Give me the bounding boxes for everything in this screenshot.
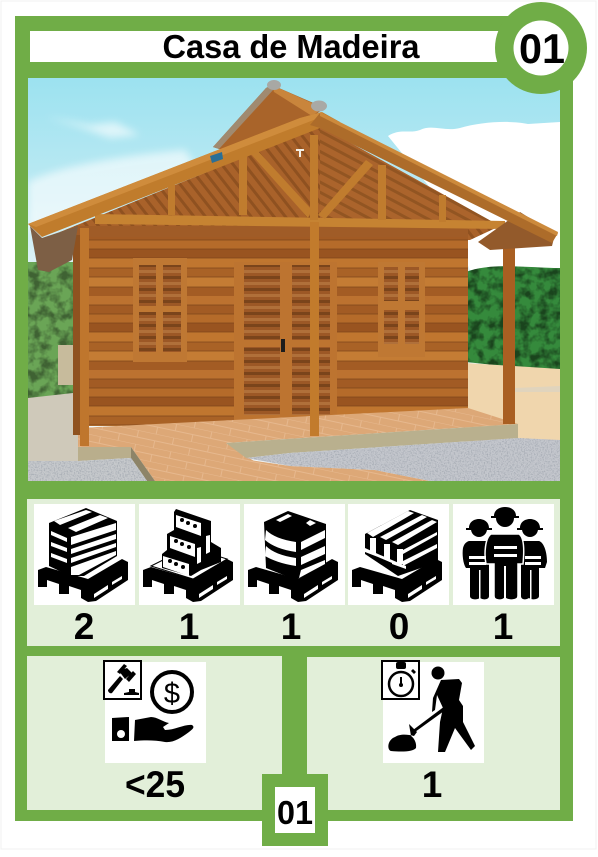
title: Casa de Madeira [162,28,420,65]
left window [133,258,187,362]
material counts: 1 [179,606,199,647]
bottom page badge [262,774,328,846]
icon: hand receiving money: $ [164,678,180,710]
gable boarding [60,126,500,240]
icon: steel beams pallet [348,504,449,605]
panel: house photo [28,78,560,481]
gravel [28,438,560,481]
card number: 01 [519,25,565,72]
page number: 01 [277,794,313,831]
door [234,262,337,421]
material counts [74,606,513,647]
icon: worker shovelling [383,662,484,763]
material counts: 0 [389,606,409,647]
icon: gavel [104,661,141,699]
material counts: 1 [281,606,301,647]
posts [73,222,515,446]
icon: sacks pallet [244,504,345,605]
panel: cost [27,656,282,810]
icon: hand receiving money [105,662,206,763]
icon: stopwatch [382,661,419,699]
wall [75,236,468,426]
background trees and ground [28,262,560,465]
material counts: 2 [74,606,94,647]
clouds [28,117,560,270]
porch floor and path [78,408,518,481]
panel: materials [27,499,560,647]
icon: wood pallet [34,504,135,605]
icon: workers [453,504,554,605]
time value: 1 [422,764,442,805]
panel: time [307,657,560,810]
front roof fascia [28,100,558,243]
soffits [30,226,78,272]
back roof [213,80,325,150]
cost value: <25 [125,764,185,805]
number badge circle [495,2,587,94]
beam and struts [95,135,505,229]
icon: bricks pallet [139,504,240,605]
material counts: 1 [493,606,513,647]
right window [378,267,425,352]
title bar [30,28,505,65]
